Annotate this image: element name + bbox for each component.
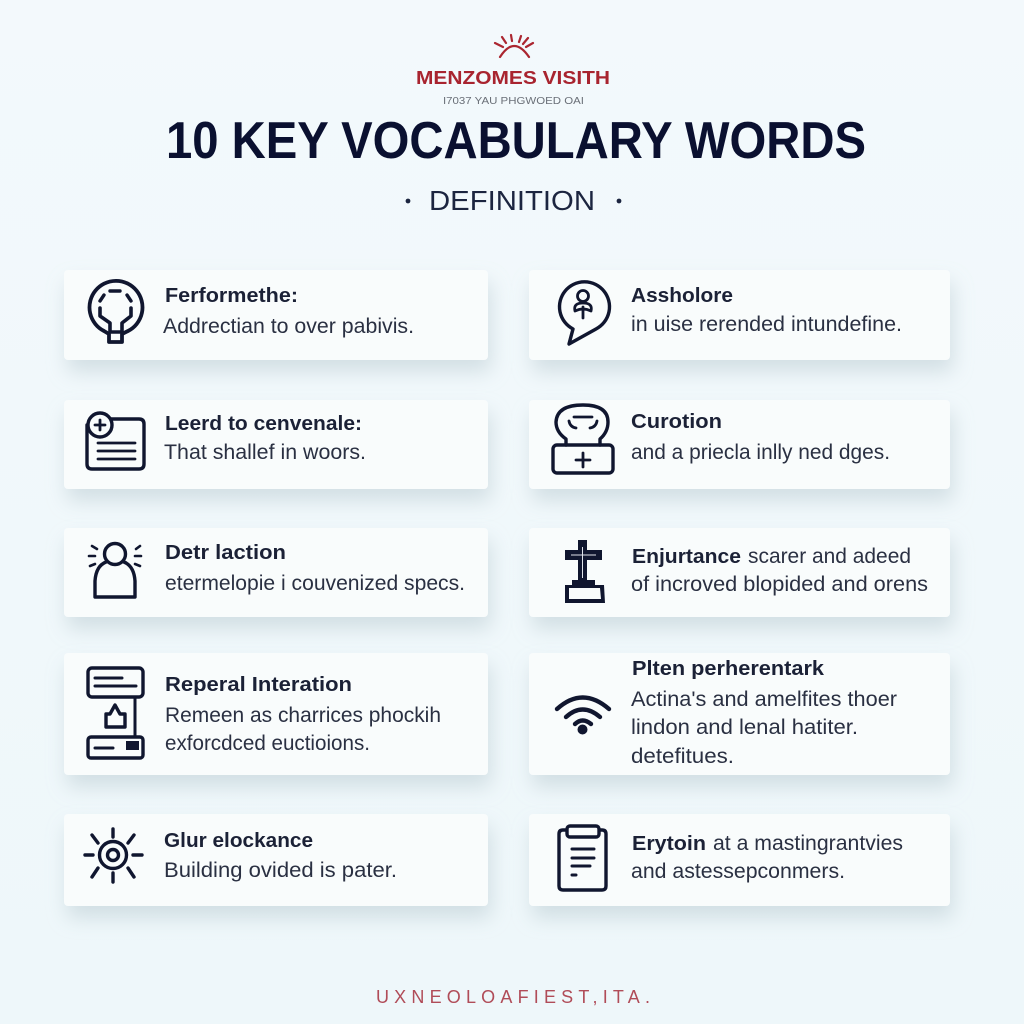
- term: Ferformethe:: [165, 284, 298, 307]
- term and definition: scarer and adeed: [748, 545, 911, 568]
- definition: and a priecla inlly ned dges.: [631, 441, 890, 464]
- icon: person with rays: [89, 544, 141, 597]
- definition: etermelopie i couvenized specs.: [165, 572, 465, 595]
- panel: Detr laction: [64, 528, 488, 617]
- icon: lightbulb: [90, 281, 142, 342]
- definition: Addrectian to over pabivis.: [163, 315, 414, 338]
- term: Glur elockance: [164, 829, 313, 852]
- icon: device with thumb: [88, 668, 143, 758]
- term: Assholore: [631, 284, 733, 307]
- icon: speech bubble with tree: [560, 282, 610, 344]
- term: Leerd to cenvenale:: [165, 412, 362, 435]
- panel: Erytoin: [529, 814, 950, 906]
- definition: in uise rerended intundefine.: [631, 313, 902, 336]
- term: Reperal Interation: [165, 673, 352, 696]
- icon: wifi: [557, 698, 609, 734]
- definition: Remeen as charrices phockih: [165, 704, 441, 727]
- icon: clipboard: [559, 826, 606, 890]
- panel: Reperal Interation: [64, 653, 488, 775]
- term and definition: Enjurtance: [632, 545, 741, 568]
- logo: tagline: I7037 YAU PHGWOED OAI: [443, 96, 584, 107]
- panel: Leerd to cenvenale: [64, 400, 488, 489]
- definition: exforcdced euctioions.: [165, 732, 370, 755]
- definition: [165, 704, 441, 755]
- panel: Enjurtance: [529, 528, 950, 617]
- icon: folder with plus: [87, 413, 144, 469]
- panel: Curotion: [529, 400, 950, 489]
- definition: Actina's and amelfites thoer: [631, 688, 897, 711]
- term and definition: of incroved blopided and orens: [631, 573, 928, 596]
- term and definition: and astessepconmers.: [631, 860, 845, 883]
- term and definition: [631, 832, 903, 883]
- term: Curotion: [631, 410, 722, 433]
- definition: lindon and lenal hatiter.: [631, 716, 858, 739]
- logo: sunrise emblem: [495, 35, 533, 57]
- panel: Glur elockance: [64, 814, 488, 906]
- footer: UXNEOLOAFIEST,ITA.: [376, 987, 650, 1007]
- term: Detr laction: [165, 541, 286, 564]
- definition: detefitues.: [631, 745, 734, 768]
- term and definition: Erytoin: [632, 832, 706, 855]
- panel: Ferformethe: [64, 270, 488, 360]
- term and definition: at a mastingrantvies: [713, 832, 903, 855]
- icon: cross on pedestal: [565, 540, 605, 603]
- logo: brand name: MENZOMES VISITH: [416, 68, 610, 88]
- definition: [631, 688, 897, 768]
- title: 10 KEY VOCABULARY WORDS: [166, 112, 866, 170]
- subtitle: definition: DEFINITION: [429, 185, 595, 216]
- term and definition: [631, 545, 928, 596]
- panel: Plten perherentark: [529, 653, 950, 775]
- definition: That shallef in woors.: [164, 441, 366, 464]
- panel: Asshalore: [529, 270, 950, 360]
- icon: case with plus: [553, 405, 613, 473]
- icon: sun: [85, 829, 142, 882]
- term: Plten perherentark: [632, 657, 825, 680]
- definition: Building ovided is pater.: [164, 859, 397, 882]
